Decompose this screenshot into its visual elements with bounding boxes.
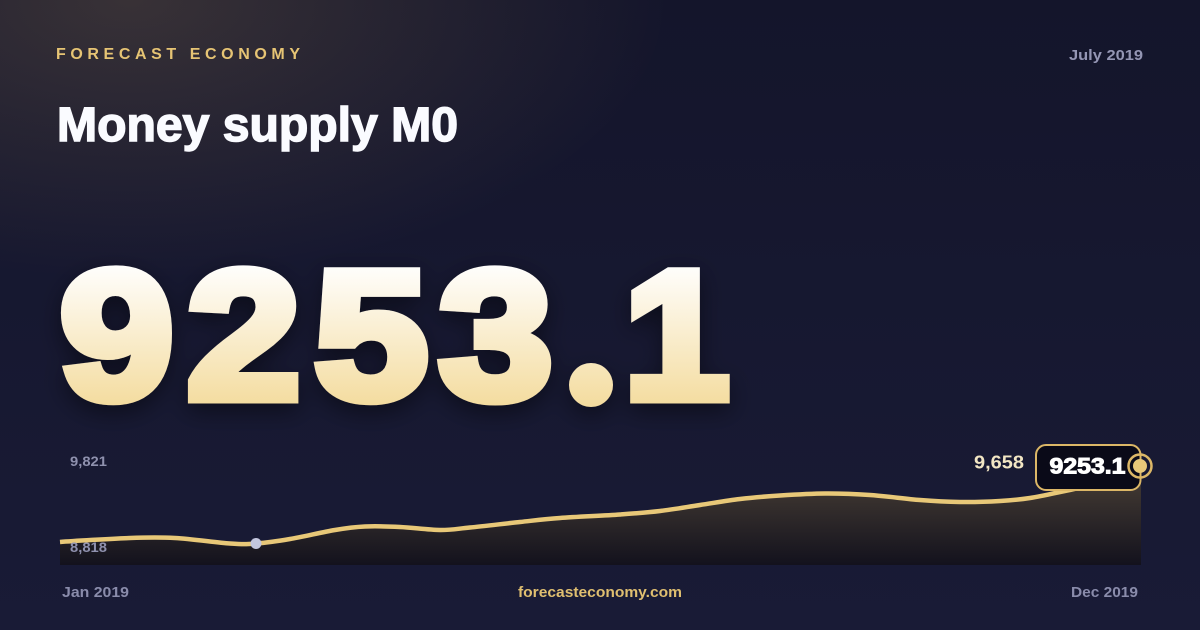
big value: 1 bbox=[624, 234, 729, 437]
value callout bbox=[1036, 445, 1140, 490]
x axis end label: Dec 2019 bbox=[1071, 584, 1138, 601]
peak value label: 9,658 bbox=[974, 452, 1024, 472]
date label: July 2019 bbox=[1069, 47, 1143, 64]
area chart bbox=[60, 466, 1141, 565]
chart area fill bbox=[60, 466, 1141, 565]
x axis start label: Jan 2019 bbox=[62, 584, 129, 601]
title: Money supply M0 bbox=[57, 99, 458, 152]
end point marker bbox=[1128, 454, 1152, 478]
axis max label: 9,821 bbox=[70, 453, 107, 469]
callout value: 9253.1 bbox=[1050, 454, 1126, 478]
axis min label: 8,818 bbox=[70, 539, 107, 555]
website: forecasteconomy.com bbox=[518, 584, 682, 601]
brand label: FORECAST ECONOMY bbox=[56, 46, 300, 63]
decimal point bbox=[569, 363, 613, 407]
low point marker bbox=[250, 538, 262, 549]
big value: 9253. bbox=[60, 233, 611, 437]
chart line bbox=[60, 466, 1141, 544]
